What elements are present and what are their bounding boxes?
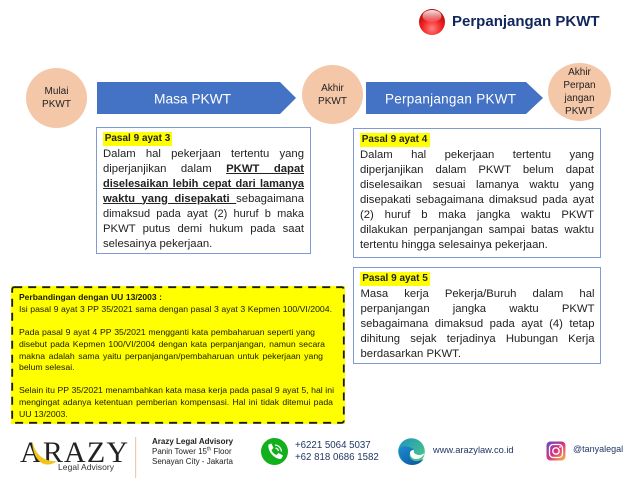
website: www.arazylaw.co.id [433,445,514,455]
circle: Mulai PKWT [26,68,87,128]
text block: perpanjangan jangka waktu PKWT [360,302,594,314]
phone numbers: +6221 5064 5037 [295,440,371,451]
text block: disepakati sebagaimana dimaksud pada ayat [360,194,594,206]
callout: Perbandingan dengan UU 13/2003 [11,286,345,424]
circle: Akhir PKWT [302,65,363,124]
heading: Perpanjangan PKWT [452,13,600,30]
text block: PKWT putus demi hukum pada saat [103,222,304,234]
text block: diselesaikan sesuai lamanya waktu yang [360,178,594,190]
text block: diperjanjikan dalam PKWT belum dapat [360,164,594,176]
text block: tertentu hingga selesainya pekerjaan. [360,238,548,250]
text block [360,148,594,250]
text block: Dalam hal pekerjaan tertentu yang [360,148,594,160]
callout text: mengingat adanya ketentuan pemberian kompensasi. Hal ini tidak ditemui pada [19,397,333,407]
text block: dilakukan perpanjangan sampai batas waktu [360,224,594,236]
text block: dimaksud pada ayat (2) huruf b maka [103,208,304,220]
text block: Dalam hal pekerjaan tertentu yang [103,148,304,160]
text block: diperjanjikan dalam PKWT dapat [103,162,304,174]
circle: Akhir Perpanjangan PKWT [548,63,611,121]
text block: selesainya pekerjaan. [103,238,212,250]
panel: Pasal 9 ayat 3 [96,127,311,254]
callout text: Perbandingan dengan UU 13/2003 : [19,292,162,302]
company address: Panin Tower 15th Floor [152,446,232,456]
circle: Akhir Perpanjangan PKWT: Akhir [568,67,591,78]
text block: sebagaimana dimaksud pada ayat (4) tetap [360,318,594,330]
callout text: makna adalah sama yaitu perpanjangan/pembaharuan untuk pekerjaan yang [19,350,323,360]
icon: web browser [398,438,425,465]
phone numbers [295,440,379,463]
callout text: Pada pasal 9 ayat 4 PP 35/2021 mengganti kata pembaharuan seperti yang [19,327,315,337]
circle: Akhir Perpanjangan PKWT: jangan [564,93,595,104]
phone numbers: +62 818 0686 1582 [295,452,379,463]
callout text: Selain itu PP 35/2021 menambahkan kata masa kerja pada pasal 9 ayat 5, hal ini [19,385,334,395]
icon: red ball [419,9,445,35]
callout text: UU 13/2003. [19,409,68,419]
text block: waktu yang disepakati sebagaimana [103,192,304,204]
company address [152,437,233,466]
heading: Pasal 9 ayat 3: Pasal 9 ayat 3 [105,133,170,144]
dashed border [11,286,345,424]
arrow: Perpanjangan PKWT: Perpanjangan PKWT [385,92,516,106]
timeline arrows [97,82,543,114]
text block: diselesaikan lebih cepat dari lamanya [103,178,304,190]
text block [103,148,304,250]
panel: Pasal 9 ayat 4 [353,128,601,258]
callout text [19,292,334,419]
arrow: Perpanjangan PKWT [366,82,543,114]
panel: Pasal 9 ayat 5 [353,267,601,364]
title [419,9,600,35]
circle: Akhir Perpanjangan PKWT: PKWT [565,106,594,117]
footer [20,436,623,478]
instagram handle: @tanyalegal [573,444,623,454]
company address: Senayan City - Jakarta [152,457,233,466]
circle: Akhir PKWT: PKWT [318,96,347,107]
callout text: Isi pasal 9 ayat 3 PP 35/2021 sama dengan pasal 3 ayat 3 Kepmen 100/VI/2004. [19,304,332,314]
text block: (2) huruf b maka jangka waktu PKWT [360,208,594,220]
callout text: disebut pada Kepmen 100/VI/2004 dengan kata perpanjangan, namun secara [19,338,325,348]
logo: Arazy Legal Advisory: Legal Advisory [58,462,115,472]
text block [360,288,595,360]
circle: Mulai PKWT: Mulai [45,86,68,97]
text block: Masa kerja Pekerja/Buruh dalam hal [360,288,594,300]
text block: berdasarkan PKWT. [360,348,461,360]
circle: Akhir PKWT: Akhir [321,83,344,94]
heading: Pasal 9 ayat 5: Pasal 9 ayat 5 [362,273,428,284]
callout text: belum selesai. [19,362,75,372]
logo: Arazy Legal Advisory: ARAZY [20,436,128,469]
circle: Akhir Perpanjangan PKWT: Perpan [563,80,596,91]
company address: Arazy Legal Advisory [152,437,233,446]
heading: Pasal 9 ayat 4: Pasal 9 ayat 4 [362,134,427,145]
circle: Mulai PKWT: PKWT [42,99,71,110]
icon: phone [261,438,288,465]
icon: instagram [546,442,566,460]
arrow: Masa PKWT [97,82,296,114]
text block: dihitung sejak terjadinya Hubungan Kerja [360,332,594,344]
arrow: Masa PKWT: Masa PKWT [154,92,232,106]
